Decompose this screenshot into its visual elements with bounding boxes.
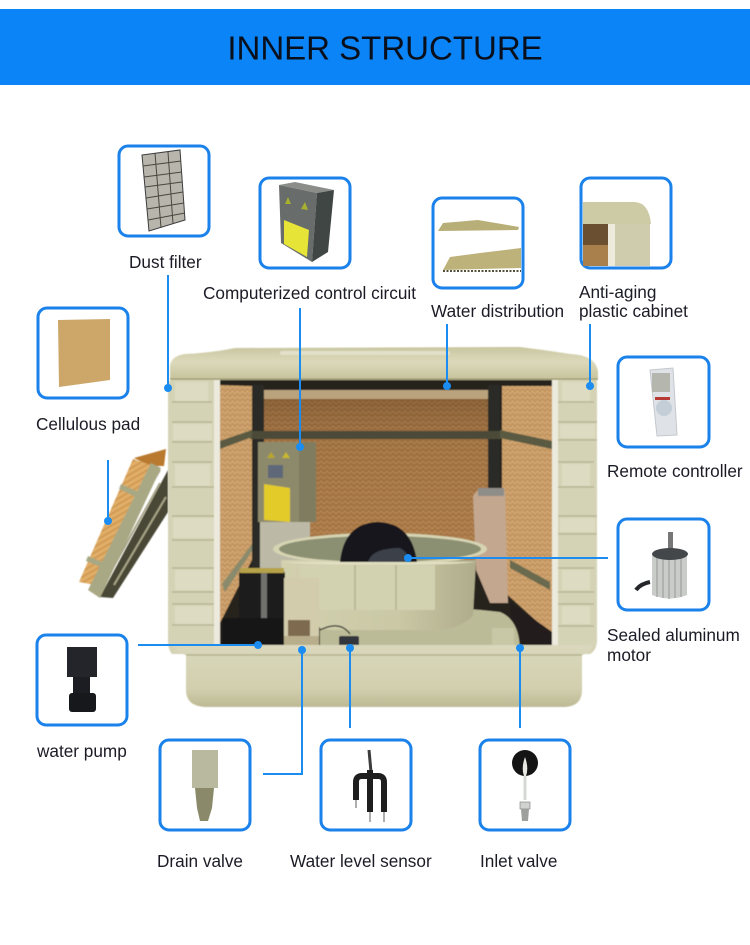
right cooling pad bbox=[502, 386, 552, 635]
icon: water distribution parts bbox=[438, 220, 521, 271]
control box bbox=[258, 442, 316, 572]
icon: remote bbox=[650, 368, 677, 436]
icon: pump bbox=[67, 647, 97, 712]
icon: cabinet corner bbox=[583, 202, 651, 266]
panel: control circuit bbox=[203, 178, 416, 303]
header banner bbox=[0, 9, 750, 85]
label: sealed aluminum motor bbox=[607, 625, 740, 665]
icon: motor bbox=[636, 532, 688, 599]
label: sealed aluminum motor: motor bbox=[607, 645, 651, 665]
motor dome bbox=[340, 522, 417, 562]
panel: cellulous pad bbox=[36, 308, 140, 434]
water distribution strip bbox=[264, 390, 490, 399]
label: drain valve: Drain valve bbox=[157, 851, 243, 871]
icon: sensor bbox=[356, 750, 384, 822]
panel: water level sensor bbox=[290, 740, 432, 871]
panel: drain valve bbox=[157, 740, 250, 871]
drain valve housing bbox=[284, 578, 319, 652]
detached cellulose pad panel bbox=[79, 449, 168, 598]
main cooler unit bbox=[168, 347, 598, 707]
panel: inlet valve bbox=[480, 740, 570, 871]
label: inlet valve: Inlet valve bbox=[480, 851, 557, 871]
label: anti-aging plastic cabinet: plastic cabinet bbox=[579, 301, 688, 321]
label: remote controller: Remote controller bbox=[607, 461, 743, 481]
frame posts and bars bbox=[220, 385, 552, 592]
icon: cellulose pad bbox=[58, 319, 110, 387]
top lid bbox=[170, 347, 598, 380]
fan bowl rim bbox=[273, 533, 487, 565]
label: cellulous pad: Cellulous pad bbox=[36, 414, 140, 434]
title: INNER STRUCTURE bbox=[227, 30, 543, 66]
label: water distribution: Water distribution bbox=[431, 301, 564, 321]
water level sensor mount bbox=[339, 636, 359, 652]
panel: plastic cabinet bbox=[579, 178, 688, 321]
air bag filter bbox=[473, 488, 508, 603]
base water tray bbox=[174, 645, 592, 707]
fan housing base bbox=[320, 608, 520, 652]
panel: water pump bbox=[36, 635, 127, 761]
label: dust filter: Dust filter bbox=[129, 252, 202, 272]
leader lines and dots bbox=[104, 275, 608, 774]
water pump bbox=[222, 568, 292, 652]
interior background bbox=[218, 378, 554, 654]
label: sealed aluminum motor: Sealed aluminum bbox=[607, 625, 740, 645]
label: anti-aging plastic cabinet: Anti-aging bbox=[579, 282, 656, 302]
icon: control box bbox=[279, 182, 334, 262]
float cable bbox=[320, 626, 350, 634]
label: water pump: water pump bbox=[36, 741, 127, 761]
icon: drain valve bbox=[192, 750, 218, 821]
left column bbox=[168, 380, 220, 654]
icon: inlet valve bbox=[512, 750, 538, 821]
label: computerized control circuit: Computerized control circuit bbox=[203, 283, 416, 303]
back cooling pad bbox=[264, 390, 490, 562]
panel: water distribution bbox=[431, 198, 564, 321]
icon: dust filter bbox=[142, 150, 185, 231]
label: water level sensor: Water level sensor bbox=[290, 851, 432, 871]
panel: sealed aluminum motor bbox=[607, 519, 740, 665]
dark right lower corner bbox=[510, 602, 552, 652]
panel: dust filter bbox=[119, 146, 209, 272]
panel: remote controller bbox=[607, 357, 743, 481]
label: anti-aging plastic cabinet bbox=[579, 282, 688, 321]
left cooling pad bbox=[219, 385, 252, 625]
fan bowl body bbox=[281, 560, 476, 630]
right column bbox=[552, 380, 597, 654]
